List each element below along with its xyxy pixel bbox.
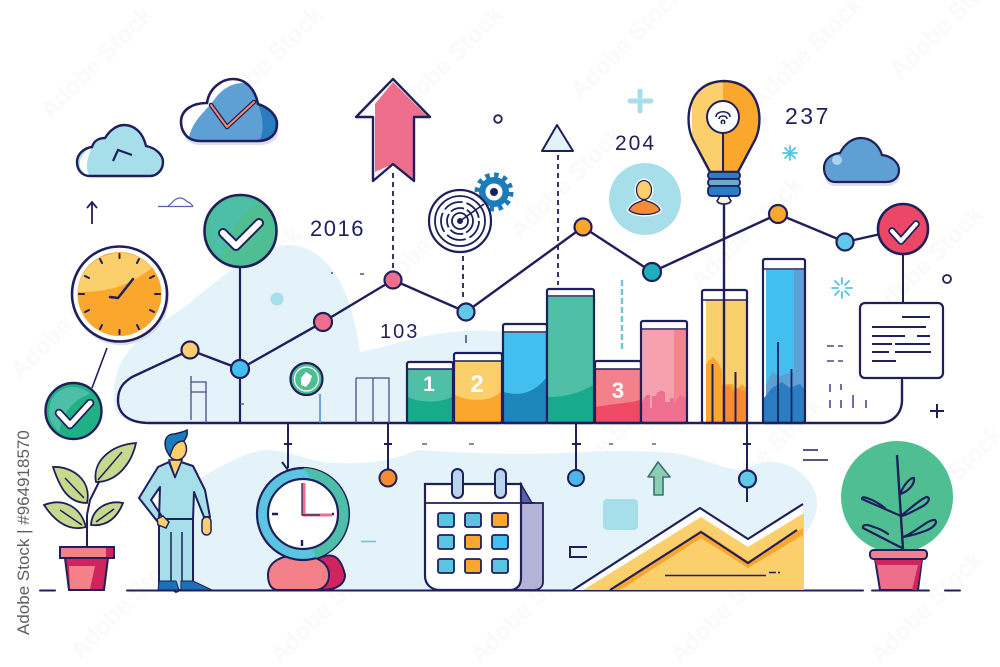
icon: standing man bbox=[139, 430, 212, 592]
small dash marks bbox=[331, 273, 866, 408]
node: yellow orange bbox=[769, 205, 787, 223]
icon: light blue plus bbox=[630, 91, 651, 111]
node: cyan bbox=[836, 234, 854, 250]
check mark fill bbox=[59, 403, 90, 425]
node: blue bbox=[231, 360, 249, 378]
node: pink top bbox=[384, 272, 402, 288]
label: 237: 237 bbox=[785, 103, 831, 129]
check mark fill bbox=[223, 223, 259, 246]
node: light blue bbox=[458, 304, 474, 320]
label: 204: 204 bbox=[615, 132, 656, 155]
icon: small arrows right bbox=[803, 450, 828, 460]
watermark pattern: Adobe Stock bbox=[465, 546, 588, 667]
icon: blue cloud right bbox=[824, 138, 900, 186]
bar 2: 2 bbox=[470, 371, 484, 398]
watermark pattern: Adobe Stock bbox=[65, 541, 188, 664]
watermark pattern: Adobe Stock bbox=[5, 261, 128, 384]
vertical image id text: Adobe Stock | #964918570 bbox=[14, 430, 33, 635]
icon: red up arrow bbox=[356, 79, 430, 181]
check mark bbox=[892, 224, 916, 241]
icon: target with gear bbox=[429, 175, 511, 252]
bar 2 bbox=[454, 353, 502, 423]
watermark pattern: Adobe Stock bbox=[185, 221, 308, 344]
ground line bbox=[40, 590, 960, 592]
node: light blue drop bbox=[739, 470, 756, 488]
line chart with axis bbox=[118, 205, 903, 423]
small chart marks in blob bbox=[191, 376, 389, 423]
calendar cells bbox=[438, 513, 508, 573]
background blob: upper bbox=[114, 245, 505, 423]
node: yellow bbox=[182, 342, 198, 358]
watermark pattern: Adobe Stock bbox=[505, 121, 628, 244]
bar 1 bbox=[407, 362, 453, 423]
leaf: top left bbox=[53, 467, 88, 503]
watermark pattern: Adobe Stock bbox=[865, 201, 988, 324]
drop connectors bbox=[282, 423, 751, 502]
leaf: top right bbox=[95, 443, 136, 482]
leaf strokes bbox=[862, 478, 936, 548]
icon: ring right bbox=[943, 275, 951, 283]
bar 1: 1 bbox=[423, 373, 435, 396]
leaf: low left bbox=[44, 502, 86, 528]
watermark pattern: Adobe Stock bbox=[665, 546, 788, 667]
bar 6 bbox=[641, 321, 687, 423]
icon: small green check badge bbox=[46, 348, 107, 439]
watermark pattern: Adobe Stock bbox=[865, 546, 988, 667]
watermark pattern: Adobe Stock bbox=[705, 391, 828, 514]
dashed connectors bbox=[393, 155, 558, 300]
watermark pattern: Adobe Stock bbox=[205, 1, 328, 124]
label: 2016: 2016 bbox=[310, 216, 365, 241]
watermark pattern: Adobe Stock bbox=[365, 451, 488, 574]
watermark pattern: Adobe Stock bbox=[165, 441, 288, 564]
bar 4 bbox=[547, 289, 594, 423]
icon: cyan star bbox=[783, 146, 797, 160]
icon: desk clock bbox=[257, 468, 349, 590]
icon: small arrow up bbox=[87, 202, 97, 224]
icon: thin cloud line bbox=[158, 198, 193, 206]
background blob: lower bbox=[175, 450, 817, 590]
watermark pattern: Adobe Stock bbox=[545, 381, 668, 504]
leaf: low right bbox=[91, 502, 123, 525]
icon: small ring bbox=[494, 115, 502, 123]
icon: green up arrow bbox=[648, 462, 670, 495]
bar 3 bbox=[503, 324, 547, 423]
check mark bbox=[59, 403, 90, 425]
icon: user circle bbox=[609, 163, 681, 235]
small dash marks below axis bbox=[422, 443, 656, 445]
icon: light bulb on pole bbox=[689, 78, 759, 423]
icon: blue square bbox=[603, 499, 638, 530]
bracket mark bbox=[570, 547, 587, 557]
bar 5: 3 bbox=[612, 378, 624, 403]
clock ticks bbox=[79, 254, 160, 334]
pot bbox=[60, 547, 114, 590]
watermark pattern: Adobe Stock bbox=[685, 171, 808, 294]
watermark pattern: Adobe Stock bbox=[385, 1, 508, 124]
bar chart bbox=[407, 259, 805, 423]
icon: calendar bbox=[425, 469, 543, 590]
watermark pattern: Adobe Stock bbox=[365, 181, 488, 304]
teal dash bbox=[361, 540, 376, 542]
node: teal bbox=[643, 263, 661, 281]
icon: plant left bbox=[44, 443, 136, 590]
watermark pattern: Adobe Stock bbox=[35, 1, 158, 124]
bar 8 bbox=[763, 259, 805, 423]
icon: wall clock bbox=[72, 246, 169, 345]
node: pink bbox=[314, 313, 332, 331]
label: 103: 103 bbox=[380, 321, 419, 343]
mountain area chart bbox=[573, 504, 804, 590]
bar 7 bbox=[702, 290, 747, 423]
bulb base bbox=[708, 172, 740, 204]
icon: green check badge with pole bbox=[204, 195, 276, 423]
node: blue drop bbox=[568, 470, 584, 486]
icon: red check badge bbox=[878, 204, 928, 254]
teal dashed line bbox=[621, 280, 623, 351]
small green badge bbox=[290, 363, 322, 423]
node: orange drop bbox=[380, 470, 396, 486]
pot bbox=[870, 550, 927, 590]
icon: light blue cloud bbox=[77, 125, 163, 176]
icon: plant right bbox=[841, 441, 953, 590]
icon: blue cloud with check bbox=[181, 79, 280, 145]
icon: cyan spark bbox=[832, 278, 852, 298]
check mark bbox=[211, 102, 254, 127]
icon: plus right bbox=[930, 404, 944, 418]
node: orange bbox=[574, 218, 592, 236]
document card bbox=[860, 254, 943, 381]
bar 5 bbox=[595, 361, 641, 423]
light blue dot bbox=[270, 292, 284, 306]
check mark bbox=[223, 223, 259, 246]
icon: triangle bbox=[542, 125, 573, 151]
watermark pattern: Adobe Stock bbox=[265, 546, 388, 667]
